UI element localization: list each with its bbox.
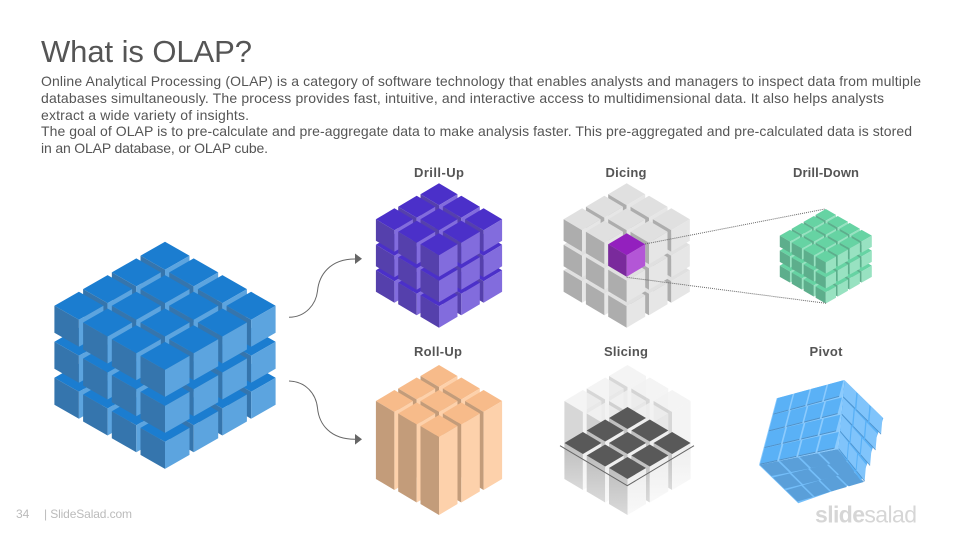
slice plane with dark tiles xyxy=(564,407,691,515)
cube: Pivot xyxy=(759,380,883,503)
arrow: to Drill-Up xyxy=(289,254,362,317)
highlighted purple sub-cube xyxy=(608,233,645,277)
heading: Slicing: Slicing xyxy=(604,344,648,359)
pivot right face xyxy=(838,380,883,482)
logo wordmark: slidesalad xyxy=(815,502,917,528)
cube: Roll-Up xyxy=(376,365,502,515)
pivot bottom face xyxy=(759,449,864,503)
plane edge line xyxy=(560,446,694,486)
description text: Online Analytical Processing (OLAP) is a category of software technology that enables analysts and managers to inspect data from multiple xyxy=(41,73,921,89)
cube: Drill-Down xyxy=(780,209,872,304)
title: What is OLAP? xyxy=(41,34,252,69)
cube: Slicing xyxy=(560,365,694,515)
heading: Pivot: Pivot xyxy=(810,344,843,359)
heading: Drill-Up: Drill-Up xyxy=(414,165,464,180)
heading: Drill-Down: Drill-Down xyxy=(793,165,859,180)
translucent upper columns xyxy=(564,365,691,480)
heading: Roll-Up: Roll-Up xyxy=(414,344,462,359)
pivot main face xyxy=(759,380,844,465)
description text: extract a wide variety of insights. xyxy=(41,107,249,123)
description text xyxy=(41,73,921,156)
page number: 34 xyxy=(16,507,30,521)
cube: Drill-Up xyxy=(376,183,502,328)
cube: Dicing xyxy=(564,183,690,328)
description text: databases simultaneously. The process provides fast, intuitive, and interactive access to multidimensional data. It also helps analysts xyxy=(41,90,884,106)
arrow: to Roll-Up xyxy=(289,381,362,445)
footer site name: | SlideSalad.com xyxy=(44,507,132,521)
dotted connector lines xyxy=(627,209,826,303)
heading: Dicing: Dicing xyxy=(606,165,647,180)
description text: in an OLAP database, or OLAP cube. xyxy=(41,140,268,156)
main blue OLAP cube xyxy=(54,242,276,469)
description text: The goal of OLAP is to pre-calculate and pre-aggregate data to make analysis faster. This pre-aggregated and pre-calculated data is stored xyxy=(41,123,912,139)
